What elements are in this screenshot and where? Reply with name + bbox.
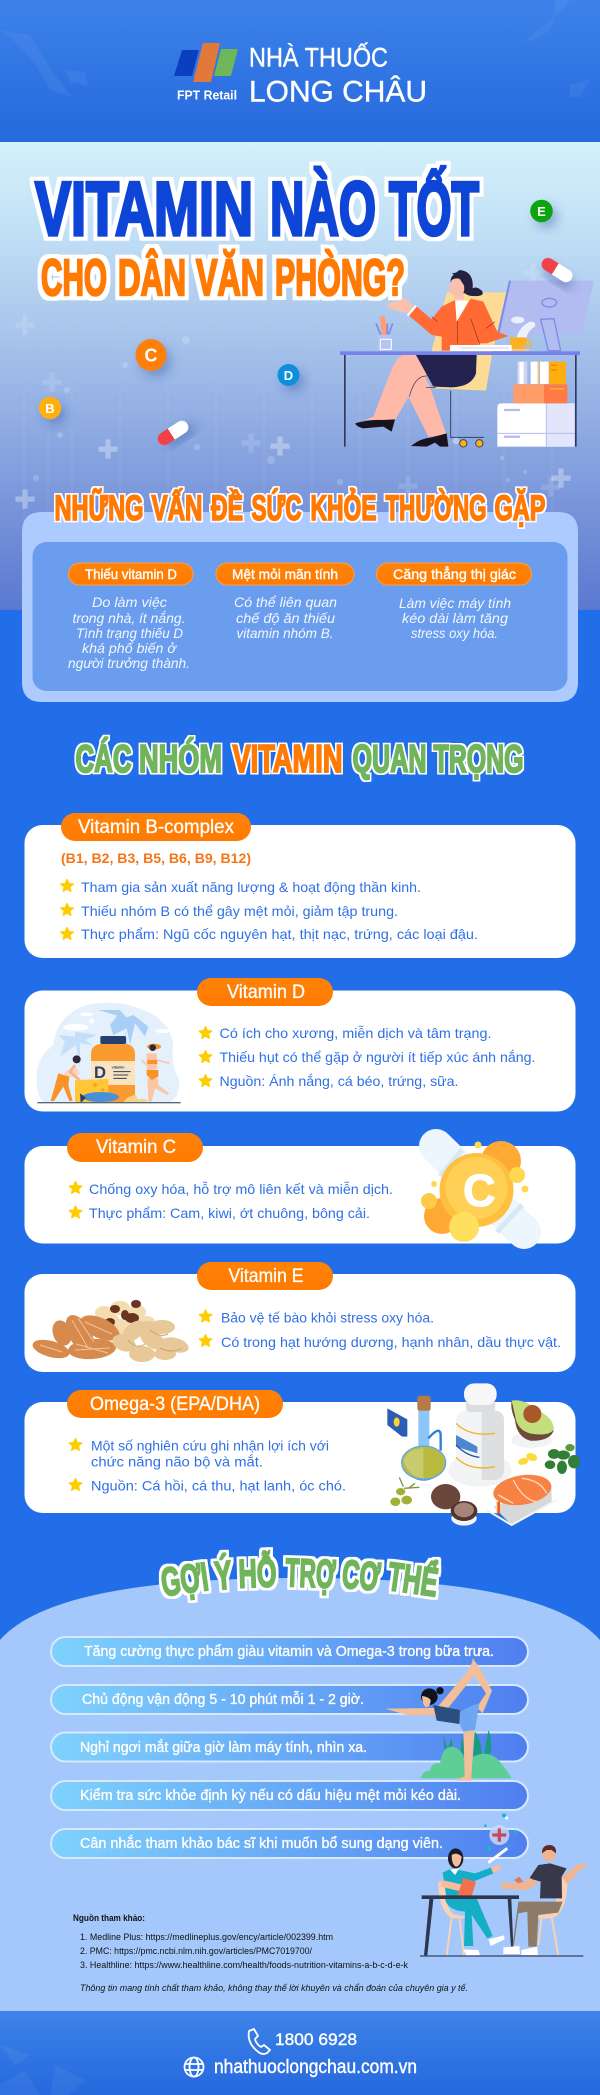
- illustration: vitamin D bottle and people: D: [94, 1063, 106, 1082]
- column: vitamin D deficiency: khá phổ biến ở: [82, 640, 178, 656]
- column: chronic fatigue: chế độ ăn thiếu: [236, 610, 335, 626]
- icon: capsule top right: [539, 255, 575, 285]
- illustration: vitamin C capsule: C: [463, 1165, 496, 1216]
- vitamin bubble D: [278, 364, 300, 386]
- heading: important vitamin groups: CÁC: [76, 737, 132, 781]
- panel: health problems: [22, 512, 578, 702]
- heading: common health problems: ĐỀ: [211, 488, 243, 528]
- illustration: vitamin D bottle and people: [37, 1003, 181, 1103]
- pill: vitamin E: [197, 1262, 333, 1290]
- pill: omega-3: Omega-3 (EPA/DHA): [90, 1394, 260, 1415]
- references: 2. PMC: https://pmc.ncbi.nlm.nih.gov/articles/PMC7019700/: [80, 1946, 312, 1956]
- illustration: mixed nuts: [31, 1300, 190, 1362]
- tip 2: [51, 1685, 528, 1714]
- pill: vitamin D: Vitamin D: [227, 982, 305, 1003]
- heading: common health problems: NHỮNG: [54, 488, 144, 528]
- column: eye strain: kéo dài làm tăng: [402, 610, 508, 626]
- card: omega-3: [24, 1383, 580, 1526]
- heading: body support: Ý: [213, 1551, 234, 1599]
- list: body support tips: [51, 1637, 528, 1858]
- panel: body support background: [0, 1578, 600, 2011]
- pill: vitamin B-complex: [61, 813, 251, 841]
- column: vitamin D deficiency: Do làm việc: [92, 594, 167, 610]
- title line 1: TỐT: [389, 167, 479, 252]
- vitamin bubble E: E: [537, 204, 546, 219]
- phone number: 1800 6928: [275, 2030, 357, 2049]
- card: vitamin D: [24, 978, 576, 1112]
- footer band: [0, 2011, 600, 2095]
- references: Thông tin mang tính chất tham khảo, không thay thế lời khuyên và chẩn đoán của chuyên gia y tế.: [80, 1983, 468, 1993]
- card: omega-3: Nguồn: Cá hồi, cá thu, hạt lanh, óc chó.: [91, 1478, 346, 1494]
- column: chronic fatigue: Có thể liên quan: [234, 594, 337, 610]
- pill: vitamin E: Vitamin E: [228, 1266, 304, 1287]
- column: eye strain: Làm việc máy tính: [399, 595, 511, 611]
- column: vitamin D deficiency: trong nhà, ít nắng.: [72, 610, 186, 626]
- doctor and patient at table: [420, 1845, 589, 1957]
- heading: important vitamin groups: VITAMIN: [232, 738, 342, 781]
- heading: body support: CƠ: [340, 1552, 383, 1600]
- logo: FPT Retail mark: FPT Retail: [177, 88, 237, 102]
- tip 4: Kiểm tra sức khỏe định kỳ nếu có dấu hiệu mệt mỏi kéo dài.: [80, 1788, 461, 1804]
- heading: common health problems: THƯỜNG: [386, 488, 486, 528]
- references: 1. Medline Plus: https://medlineplus.gov/ency/article/002399.htm: [80, 1932, 333, 1942]
- card: vitamin C: [24, 1133, 576, 1244]
- logo: FPT Retail mark: [174, 43, 238, 102]
- heading: common health problems: VẤN: [152, 488, 202, 528]
- column: chronic fatigue: [216, 563, 354, 641]
- hero background with pattern: [0, 142, 600, 610]
- title line 2: PHÒNG?: [275, 249, 405, 306]
- heading: common health problems: SỨC: [252, 488, 302, 528]
- heading: important vitamin groups: NHÓM: [139, 737, 222, 781]
- references: Nguồn tham khảo:: [73, 1913, 145, 1923]
- header band: [0, 0, 600, 142]
- heading: common health problems: KHỎE: [310, 488, 376, 528]
- card: vitamin B-complex: [24, 813, 576, 958]
- column: chronic fatigue: vitamin nhóm B.: [236, 625, 334, 641]
- column: vitamin D deficiency: Thiếu vitamin D: [85, 566, 177, 582]
- medical cross and syringe: [484, 1813, 517, 1863]
- card: vitamin B-complex: (B1, B2, B3, B5, B6, B9, B12): [61, 850, 251, 866]
- pill: vitamin D: [197, 978, 333, 1006]
- title line 1: [35, 167, 479, 252]
- column: vitamin D deficiency: Tình trạng thiếu D: [76, 625, 183, 641]
- illustration: vitamin D bottle and people: vitamin: [112, 1065, 124, 1069]
- card: vitamin B-complex: Tham gia sản xuất năng lượng & hoạt động thần kinh.: [81, 879, 421, 895]
- card: vitamin C: Chống oxy hóa, hỗ trợ mô liên kết và miễn dịch.: [89, 1181, 393, 1197]
- icon: phone: [249, 2029, 270, 2054]
- illustration: office woman at desk: [340, 270, 593, 447]
- column: eye strain: Căng thẳng thị giác: [393, 565, 516, 582]
- card: vitamin B-complex: Thiếu nhóm B có thể gây mệt mỏi, giảm tập trung.: [81, 903, 398, 919]
- card: vitamin B-complex: Thực phẩm: Ngũ cốc nguyên hạt, thịt nạc, trứng, các loại đậu.: [81, 926, 478, 942]
- icon: capsule bottom left: [155, 418, 191, 448]
- illustration: vitamin C capsule: [421, 1141, 528, 1242]
- vitamin bubble D: D: [284, 368, 293, 383]
- tip 5: Cân nhắc tham khảo bác sĩ khi muốn bổ sung dạng viên.: [80, 1835, 443, 1852]
- title line 2: DÂN: [118, 248, 186, 306]
- vitamin bubble C: [136, 339, 166, 371]
- tip 4: [51, 1781, 528, 1810]
- column: vitamin D deficiency: người trưởng thành.: [68, 655, 190, 671]
- vitamin bubble C: C: [144, 346, 158, 366]
- card: vitamin E: [24, 1262, 576, 1372]
- references: 3. Healthline: https://www.healthline.com/health/foods-nutrition-vitamins-a-b-c-d-e-k: [80, 1960, 408, 1970]
- card: vitamin E: Có trong hạt hướng dương, hạnh nhân, dầu thực vật.: [221, 1334, 561, 1350]
- title line 2: VĂN: [196, 249, 264, 306]
- logo: pharmacy name: LONG CHÂU: [249, 76, 427, 108]
- title line 1: VITAMIN: [35, 167, 253, 252]
- tip 1: Tăng cường thực phẩm giàu vitamin và Omega-3 trong bữa trưa.: [84, 1644, 494, 1660]
- tip 3: Nghỉ ngơi mắt giữa giờ làm máy tính, nhìn xa.: [80, 1739, 367, 1756]
- vitamin bubble B: [39, 397, 61, 419]
- card: vitamin D: Thiếu hụt có thể gặp ở người ít tiếp xúc ánh nắng.: [220, 1049, 536, 1065]
- vitamin bubble E: [530, 200, 553, 222]
- references: [73, 1913, 468, 1993]
- card: omega-3: Một số nghiên cứu ghi nhận lợi ích với: [91, 1438, 329, 1454]
- tip 5: [51, 1829, 528, 1858]
- heading: body support: THỂ: [385, 1552, 441, 1605]
- illustration: yoga and doctor consultation: [385, 1658, 589, 1957]
- title line 2: [41, 248, 405, 306]
- column: chronic fatigue: Mệt mỏi mãn tính: [232, 566, 338, 582]
- column: eye strain: [376, 563, 532, 641]
- heading: common health problems: GẶP: [494, 489, 546, 528]
- icon: globe: [184, 2058, 204, 2076]
- heading: body support: TRỢ: [285, 1551, 337, 1597]
- column: vitamin D deficiency: [68, 563, 193, 671]
- title line 2: CHO: [41, 249, 107, 306]
- card: vitamin E: Bảo vệ tế bào khỏi stress oxy hóa.: [221, 1310, 434, 1326]
- tip 1: [51, 1637, 528, 1666]
- card: vitamin D: Nguồn: Ánh nắng, cá béo, trứng, sữa.: [220, 1073, 458, 1089]
- pill: vitamin C: Vitamin C: [96, 1137, 176, 1158]
- heading: important vitamin groups: QUAN: [352, 738, 426, 781]
- heading: body support: [158, 1549, 441, 1605]
- heading: important vitamin groups: [76, 737, 524, 781]
- pill: vitamin C: [67, 1133, 203, 1162]
- yoga woman: [385, 1658, 512, 1781]
- card: vitamin D: Có ích cho xương, miễn dịch và tâm trạng.: [220, 1025, 492, 1041]
- column: eye strain: stress oxy hóa.: [411, 625, 498, 641]
- card: omega-3: chức năng não bộ và mắt.: [91, 1454, 263, 1470]
- title line 1: NÀO: [270, 167, 376, 252]
- website: nhathuoclongchau.com.vn: [214, 2057, 417, 2078]
- pill: vitamin B-complex: Vitamin B-complex: [78, 817, 234, 838]
- illustration: omega-3 foods: [387, 1383, 580, 1526]
- tip 3: [51, 1732, 528, 1762]
- vitamin bubble B: B: [45, 401, 55, 416]
- card: vitamin C: Thực phẩm: Cam, kiwi, ớt chuông, bông cải.: [89, 1205, 370, 1221]
- tip 2: Chủ động vận động 5 - 10 phút mỗi 1 - 2 giờ.: [82, 1691, 364, 1708]
- heading: important vitamin groups: TRỌNG: [434, 738, 524, 781]
- logo: pharmacy name: NHÀ THUỐC: [249, 40, 388, 72]
- pill: omega-3: [67, 1390, 283, 1418]
- heading: common health problems: [54, 488, 546, 528]
- heading: body support: HỖ: [238, 1549, 277, 1597]
- heading: body support: GỢI: [158, 1555, 211, 1605]
- logo: pharmacy name: [249, 40, 427, 108]
